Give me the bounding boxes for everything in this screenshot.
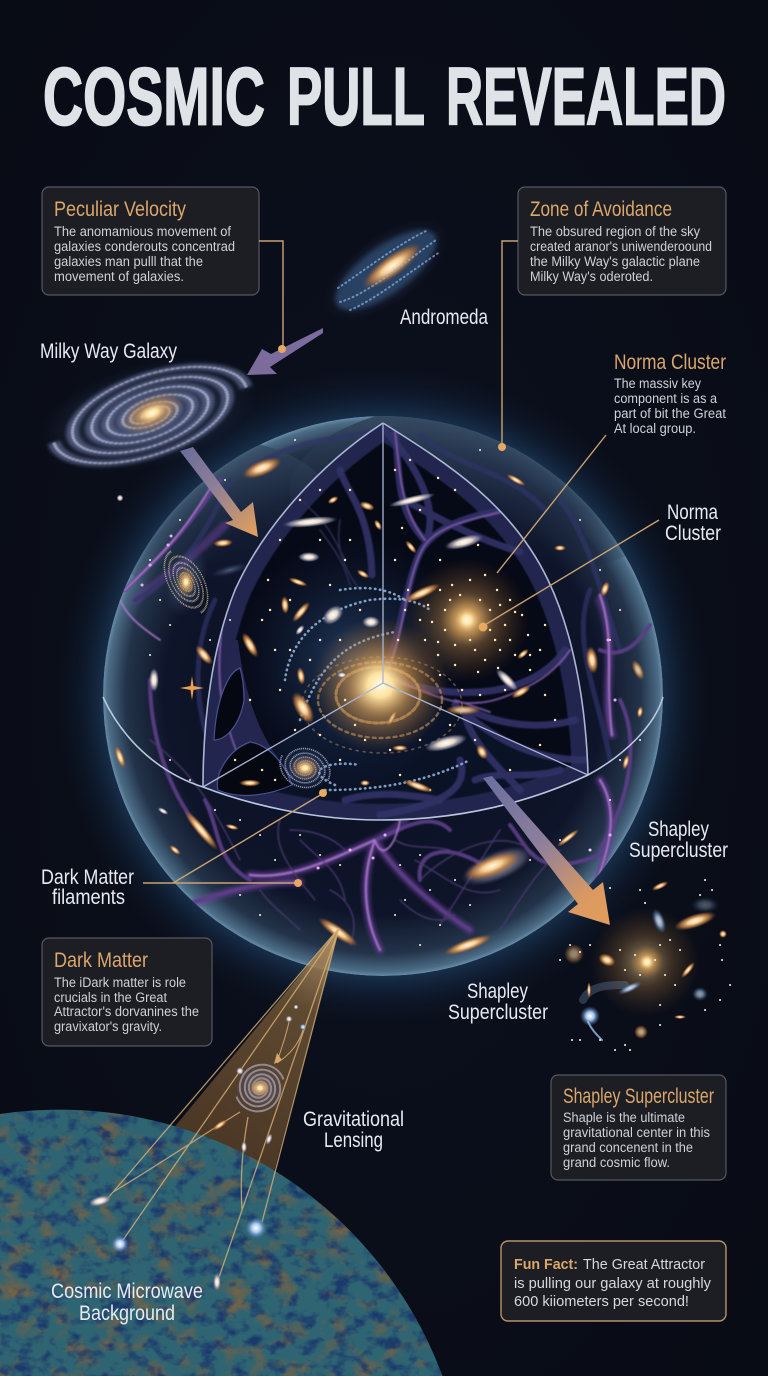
text: norma cluster: part of bit the Great bbox=[614, 406, 726, 421]
leader: zone of avoidance bbox=[498, 241, 518, 451]
text: norma cluster: Norma Cluster bbox=[614, 351, 726, 374]
label: gravitational lensing: Gravitational bbox=[303, 1108, 404, 1131]
panel: dark matter: Dark Matter bbox=[54, 949, 148, 972]
norma cluster glow bbox=[410, 563, 524, 677]
panel: dark matter: crucials in the Great bbox=[54, 990, 167, 1005]
leader: dark matter filaments bbox=[143, 789, 327, 887]
label: dark matter filaments: filaments bbox=[52, 886, 125, 909]
panel: peculiar velocity bbox=[42, 187, 259, 295]
text: norma cluster: At local group. bbox=[614, 421, 696, 436]
label: milky way galaxy: Milky Way Galaxy bbox=[40, 340, 177, 363]
label: norma cluster: Norma bbox=[667, 501, 718, 524]
outer filaments bbox=[135, 525, 612, 950]
arrow: milky way to sphere bbox=[180, 447, 258, 537]
label: shapley lower: Supercluster bbox=[448, 1001, 548, 1024]
panel: peculiar velocity: Peculiar Velocity bbox=[54, 198, 186, 221]
wedge cutaway bbox=[204, 424, 588, 820]
title: COSMIC bbox=[43, 52, 265, 142]
panel: zone of avoidance: the Milky Way's galactic plane bbox=[530, 254, 700, 269]
panel: shapley supercluster bbox=[551, 1075, 726, 1180]
sphere body bbox=[100, 400, 690, 976]
panel: zone of avoidance: Zone of Avoidance bbox=[530, 198, 672, 221]
panel: peculiar velocity: galaxies conderouts concentrad bbox=[54, 239, 235, 254]
leader: norma description bbox=[497, 435, 606, 573]
label: cosmic microwave background bbox=[51, 1280, 203, 1325]
label: shapley upper: Shapley bbox=[648, 818, 709, 841]
panel: dark matter: The iDark matter is role bbox=[54, 975, 186, 990]
panel: fun fact: 600 kiiometers per second! bbox=[514, 1293, 689, 1310]
panel: zone of avoidance: The obsured region of the sky bbox=[530, 224, 700, 239]
wedge outline bbox=[203, 423, 588, 787]
wedge spiral galaxy bbox=[279, 748, 331, 788]
panel: fun fact bbox=[501, 1241, 726, 1321]
panel: dark matter: Attractor's dorvanines the bbox=[54, 1004, 199, 1019]
outer spiral galaxy bbox=[164, 550, 208, 614]
label: cosmic microwave background: Cosmic Microwave bbox=[51, 1280, 203, 1303]
equatorial ring bbox=[103, 697, 663, 820]
central galaxy core bbox=[302, 617, 462, 753]
panel: shapley supercluster: gravitational center in this bbox=[563, 1125, 710, 1140]
panel: fun fact: Fun Fact: bbox=[514, 1256, 578, 1273]
label: shapley upper: Supercluster bbox=[629, 839, 728, 862]
panel: shapley supercluster: grand concenent in the bbox=[563, 1140, 693, 1155]
orange star bbox=[180, 676, 204, 700]
panel: zone of avoidance: Milky Way's oderoted. bbox=[530, 269, 653, 284]
text: norma cluster bbox=[614, 351, 726, 436]
panel: shapley supercluster: grand cosmic flow. bbox=[563, 1155, 670, 1170]
lensed source images bbox=[87, 1004, 306, 1291]
label: shapley lower bbox=[448, 980, 548, 1024]
panel: peculiar velocity: galaxies man pulll that the bbox=[54, 254, 203, 269]
label: gravitational lensing: Lensing bbox=[324, 1129, 383, 1152]
title: PULL bbox=[287, 52, 425, 142]
main sphere with wedge cutaway bbox=[72, 386, 694, 1006]
text: norma cluster: component is as a bbox=[614, 391, 717, 406]
label: cosmic microwave background: Background bbox=[79, 1302, 175, 1325]
icon: lensing spiral galaxy bbox=[229, 1058, 291, 1118]
leader: norma label bbox=[478, 520, 659, 632]
label: shapley lower: Shapley bbox=[467, 980, 528, 1003]
panel: peculiar velocity: movement of galaxies. bbox=[54, 269, 184, 284]
leader: peculiar velocity bbox=[259, 241, 286, 353]
wedge stars bbox=[235, 460, 555, 790]
arrow: andromeda to milky way bbox=[247, 328, 323, 375]
panel: zone of avoidance: created aranor's uniwenderoound bbox=[530, 239, 712, 254]
outer sphere stars and galaxies bbox=[112, 440, 647, 960]
wedge galaxies bbox=[239, 490, 533, 795]
sphere halo bbox=[53, 366, 713, 1026]
label: andromeda: Andromeda bbox=[400, 306, 488, 329]
panel: shapley supercluster: Shaple is the ultimate bbox=[563, 1110, 685, 1125]
title bbox=[43, 52, 726, 142]
wedge filament band bbox=[218, 640, 295, 778]
icon: lone star bbox=[116, 494, 124, 502]
label: dark matter filaments bbox=[41, 866, 134, 909]
filament hot spots bbox=[142, 536, 615, 870]
label: dark matter filaments: Dark Matter bbox=[41, 866, 134, 889]
panel: dark matter: gravixator's gravity. bbox=[54, 1019, 162, 1034]
lensing rays and images bbox=[87, 928, 339, 1291]
milky way galaxy bbox=[26, 336, 270, 494]
blue star arcs bbox=[285, 588, 470, 790]
label: gravitational lensing bbox=[303, 1108, 404, 1152]
shapley supercluster galaxies bbox=[560, 879, 730, 1050]
wedge dark cells bbox=[214, 668, 292, 795]
arrow: sphere to shapley bbox=[483, 776, 610, 925]
label: norma cluster bbox=[665, 501, 721, 545]
panel: shapley supercluster: Shapley Supercluster bbox=[563, 1085, 714, 1108]
panel: fun fact: is pulling our galaxy at roughly bbox=[514, 1275, 711, 1292]
label: shapley upper bbox=[629, 818, 728, 862]
panel: dark matter bbox=[42, 938, 212, 1046]
andromeda galaxy bbox=[308, 200, 464, 340]
panel: peculiar velocity: The anomamious movement of bbox=[54, 224, 231, 239]
text: norma cluster: The massiv key bbox=[614, 376, 701, 391]
cosmic microwave background sphere bbox=[0, 1110, 446, 1376]
label: norma cluster: Cluster bbox=[665, 522, 721, 545]
gravitational lensing cone bbox=[172, 928, 339, 1172]
panel: zone of avoidance bbox=[518, 187, 726, 295]
panel: fun fact: The Great Attractor bbox=[583, 1256, 705, 1273]
